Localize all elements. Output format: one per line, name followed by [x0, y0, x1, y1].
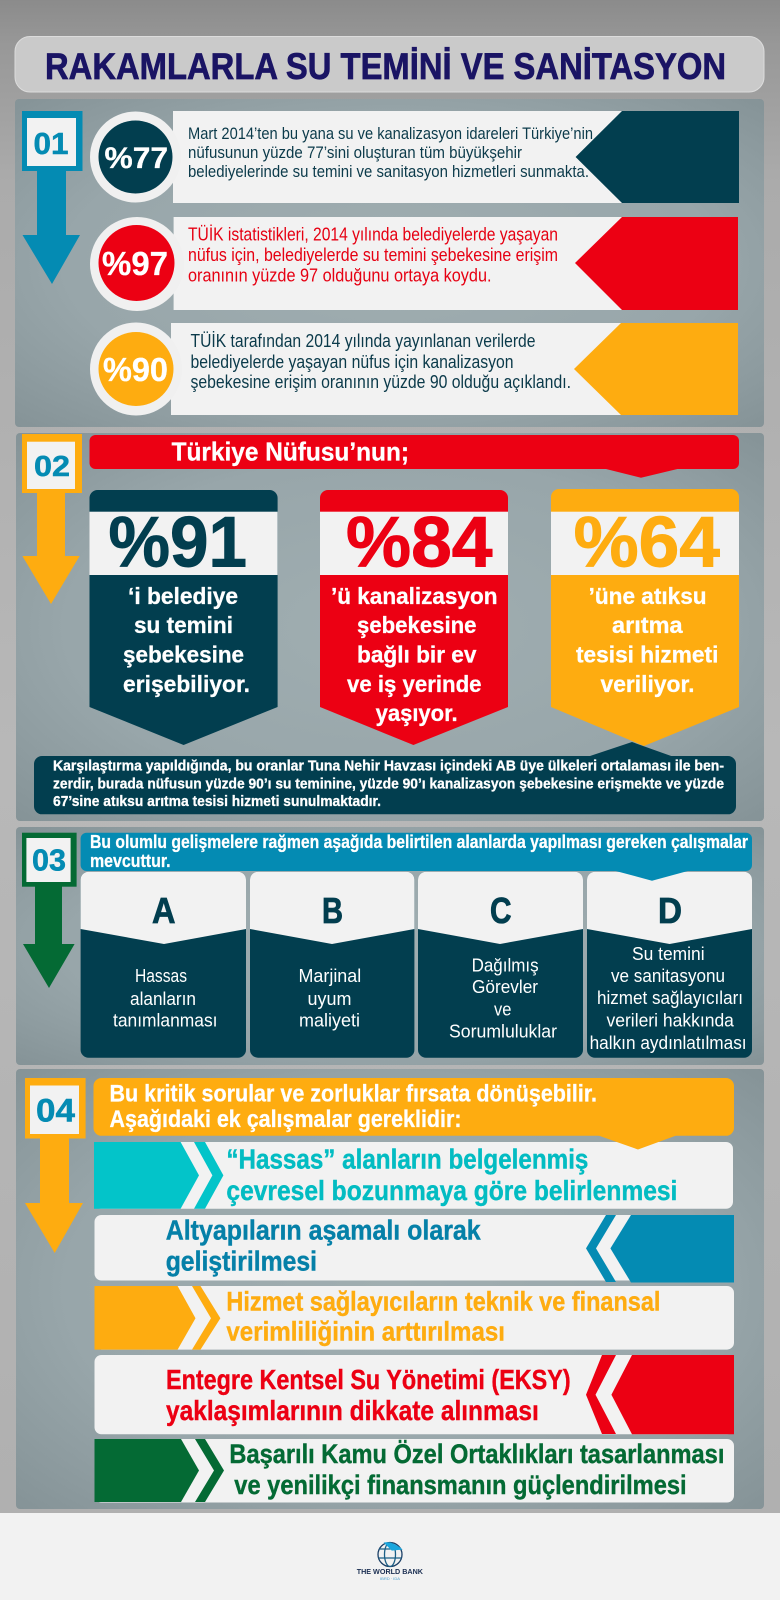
bar: 90 percent: şebekesine erişim oranının yüzde 90 olduğu açıklandı.: [190, 372, 571, 392]
card: 91 percent: [90, 490, 278, 745]
row: efficiency: verimliliğinin arttırılması: [226, 1317, 505, 1347]
row: infrastructure: Altyapıların aşamalı olarak: [166, 1215, 481, 1246]
card B: [250, 872, 414, 1058]
card: 91 percent: su temini: [134, 612, 233, 638]
card D: halkın aydınlatılması: [590, 1033, 747, 1053]
card: 64 percent: ’üne atıksu: [589, 583, 707, 609]
row: integrated urban water management: [94, 1355, 734, 1434]
icon: 97 percent circle: [90, 217, 184, 311]
card: 84 percent: [320, 490, 508, 745]
banner: Türkiye Nüfusu'nun: Türkiye Nüfusu’nun;: [172, 437, 409, 467]
callout: comparison: zerdir, burada nüfusun yüzde 90’ı su teminine, yüzde 90’ı kanalizasyon şebekesine erişmekte ve yüzde: [53, 776, 724, 793]
card C: ve: [494, 1000, 511, 1020]
panel: 01 service statistics: [15, 99, 764, 427]
row: public private partnerships: Başarılı Kamu Özel Ortaklıkları tasarlanması: [229, 1439, 724, 1469]
row: infrastructure: geliştirilmesi: [166, 1246, 317, 1277]
panel: 03 work areas: [16, 827, 764, 1065]
card A: Hassas: [135, 966, 187, 986]
callout: comparison: Karşılaştırma yapıldığında, bu oranlar Tuna Nehir Havzası içindeki AB üye ülkeleri ortalaması ile ben-: [53, 758, 724, 775]
icon: 90 percent circle: [90, 322, 182, 416]
icon: 97 percent circle: %97: [102, 245, 168, 282]
card C: Görevler: [472, 977, 538, 997]
card: 84 percent: bağlı bir ev: [357, 642, 477, 668]
card B: Marjinal: [298, 966, 361, 986]
bar: 90 percent: [171, 323, 738, 415]
badge 03 with arrow: 03: [32, 843, 66, 878]
row: integrated urban water management: yaklaşımlarının dikkate alınması: [166, 1395, 539, 1426]
bar: 77 percent: belediyelerinde su temini ve sanitasyon hizmetleri sunmakta.: [188, 162, 589, 181]
banner: Türkiye Nüfusu'nun: [90, 435, 739, 478]
card: 91 percent: %91: [108, 504, 247, 583]
card: 64 percent: arıtma: [612, 612, 683, 638]
bar: 77 percent: [173, 111, 739, 203]
row: infrastructure: [94, 1215, 734, 1282]
bar: 90 percent: TÜİK tarafından 2014 yılında yayınlanan verilerde: [190, 331, 536, 351]
row: public private partnerships: [94, 1439, 734, 1502]
row: public private partnerships: ve yenilikçi finansmanın güçlendirilmesi: [234, 1470, 687, 1500]
bar: 90 percent: belediyelerde yaşayan nüfus için kanalizasyon: [190, 352, 514, 372]
banner: intro to work areas: [81, 832, 752, 881]
card C: [418, 872, 583, 1058]
badge 04 with arrow: 04: [36, 1092, 75, 1128]
card: 91 percent: şebekesine: [123, 642, 244, 668]
card: 84 percent: ’ü kanalizasyon: [331, 583, 498, 609]
card C: Dağılmış: [472, 956, 539, 976]
badge 01 with arrow: 01: [34, 126, 68, 161]
panel: 04 additional work: [16, 1069, 764, 1509]
card B: maliyeti: [299, 1011, 360, 1031]
row: integrated urban water management: Entegre Kentsel Su Yönetimi (EKSY): [166, 1364, 571, 1395]
card D: hizmet sağlayıcıları: [597, 988, 743, 1008]
banner: critical questions: Aşağıdaki ek çalışmalar gereklidir:: [110, 1106, 462, 1133]
icon: 77 percent circle: %77: [104, 142, 168, 175]
row: sensitive areas: [94, 1142, 733, 1209]
banner: intro to work areas: mevcuttur.: [90, 851, 171, 871]
card D: verileri hakkında: [606, 1011, 735, 1031]
title bar: [15, 36, 764, 92]
card A: [81, 872, 246, 1058]
card: 64 percent: veriliyor.: [600, 671, 694, 697]
bar: 97 percent: [174, 217, 738, 310]
logo sub-label: IBRD · IDA: [380, 1577, 401, 1581]
row: efficiency: Hizmet sağlayıcıların teknik ve finansal: [226, 1286, 660, 1316]
card: 64 percent: tesisi hizmeti: [576, 642, 718, 668]
bar: 97 percent: nüfus için, belediyelerde su temini şebekesine erişim: [188, 245, 558, 265]
card: 84 percent: %84: [346, 504, 493, 583]
bar: 77 percent: nüfusunun yüzde 77’sini oluşturan tüm büyükşehir: [188, 143, 522, 162]
panel: 02 population shares: [16, 433, 764, 821]
badge 04 with arrow: [25, 1078, 86, 1253]
bar: 97 percent: oranının yüzde 97 olduğunu ortaya koydu.: [188, 266, 492, 286]
badge 03 with arrow: [22, 833, 77, 988]
icon: 77 percent circle: [90, 112, 181, 202]
row: sensitive areas: çevresel bozunmaya göre belirlenmesi: [226, 1175, 677, 1206]
card A: alanların: [130, 989, 196, 1009]
icon: 90 percent circle: %90: [103, 351, 168, 388]
badge 02 with arrow: [22, 434, 82, 604]
footer band: [0, 1513, 780, 1600]
card D: Su temini: [632, 944, 705, 964]
card D: ve sanitasyonu: [611, 966, 725, 986]
icon: World Bank globe: [378, 1542, 402, 1566]
card: 84 percent: şebekesine: [357, 612, 476, 638]
card D: [587, 872, 752, 1058]
card: 84 percent: yaşıyor.: [376, 700, 458, 726]
card: 64 percent: [551, 489, 739, 746]
row: sensitive areas: “Hassas” alanların belgelenmiş: [226, 1144, 588, 1174]
callout: comparison: [34, 742, 736, 814]
card: 64 percent: %64: [574, 504, 721, 583]
badge 01 with arrow: [22, 111, 82, 284]
card C: C: [490, 890, 512, 931]
card: 91 percent: ‘i belediye: [128, 583, 238, 609]
card D: D: [658, 890, 682, 931]
row: efficiency: [94, 1286, 734, 1350]
card C: Sorumluluklar: [449, 1022, 557, 1042]
card: 84 percent: ve iş yerinde: [347, 671, 482, 697]
callout: comparison: 67’sine atıksu arıtma tesisi hizmeti sunulmaktadır.: [53, 793, 381, 810]
card A: tanımlanması: [113, 1011, 218, 1031]
banner: critical questions: Bu kritik sorular ve zorluklar fırsata dönüşebilir.: [110, 1080, 597, 1107]
badge 02 with arrow: 02: [34, 451, 70, 483]
banner: critical questions: [94, 1078, 734, 1150]
card: 91 percent: erişebiliyor.: [123, 671, 250, 697]
card A: A: [152, 890, 176, 931]
card B: uyum: [308, 989, 352, 1009]
bar: 77 percent: Mart 2014’ten bu yana su ve kanalizasyon idareleri Türkiye’nin: [188, 124, 593, 143]
card B: B: [322, 890, 343, 931]
bar: 97 percent: TÜİK istatistikleri, 2014 yılında belediyelerde yaşayan: [188, 225, 558, 245]
logo wordmark: THE WORLD BANK: [357, 1567, 424, 1576]
